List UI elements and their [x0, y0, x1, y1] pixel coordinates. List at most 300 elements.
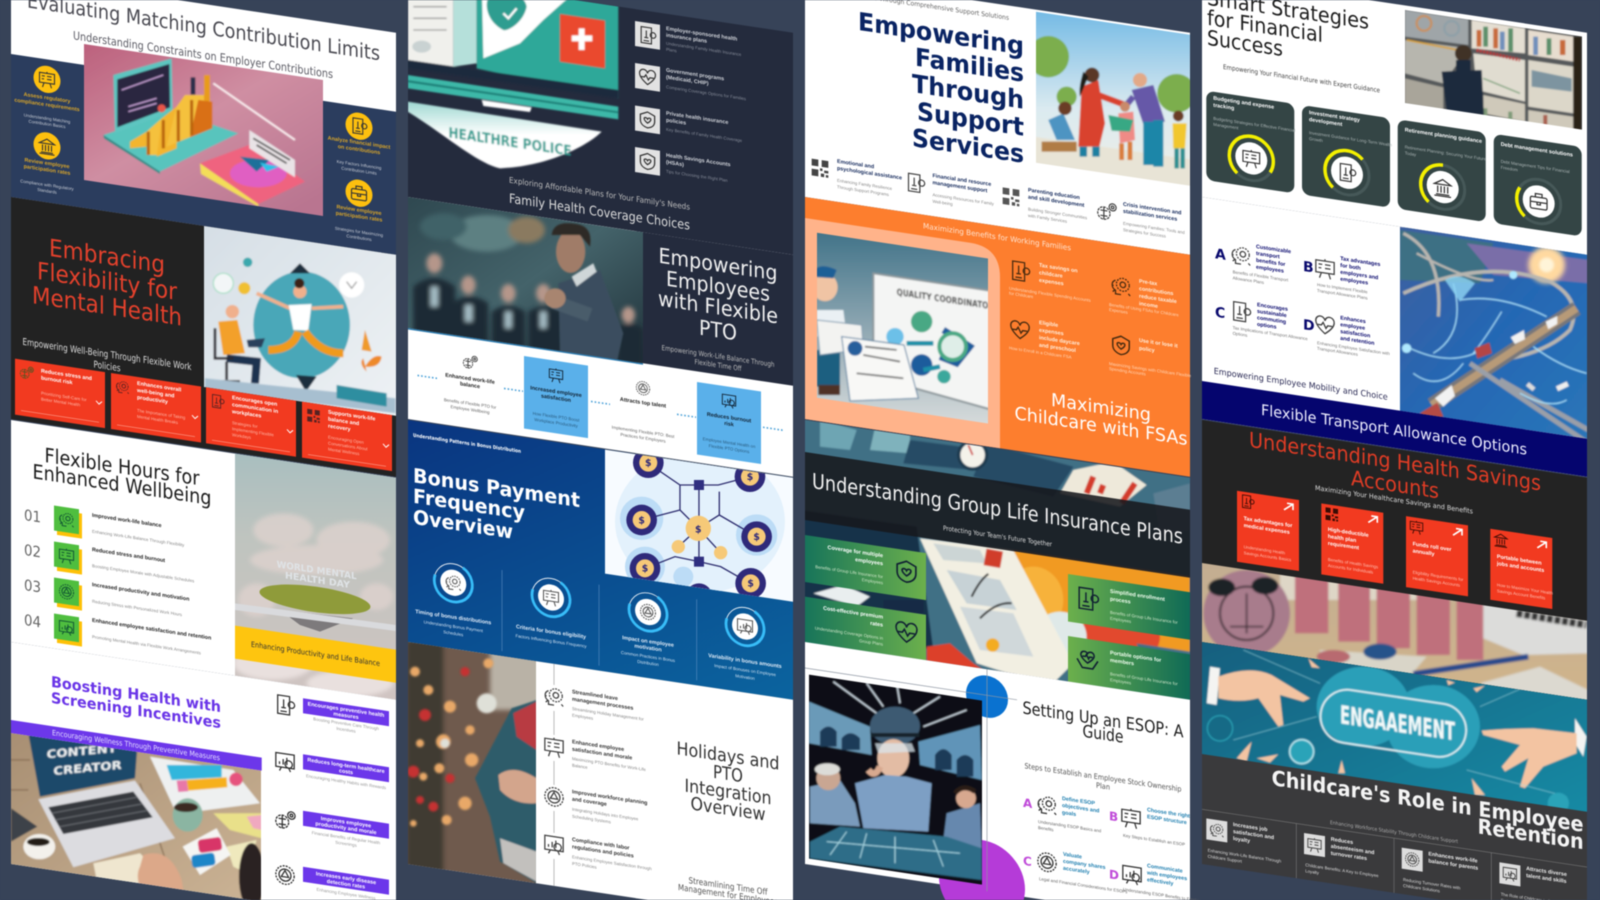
step C	[1023, 846, 1127, 894]
item: work-life balance	[444, 352, 497, 416]
item: burnout risk: Reduces burnout	[707, 412, 751, 424]
title: Family Health Coverage Choices	[509, 192, 690, 234]
card: debt	[1494, 134, 1582, 239]
card: encourages communication: Strategies for	[232, 420, 258, 429]
item: review participation right: Review employee	[337, 204, 381, 217]
row: government programs	[635, 63, 746, 105]
subtitle: Maximizing Your Healthcare Savings and Benefits	[1315, 484, 1473, 516]
item: absenteeism	[1304, 833, 1379, 884]
title: Frequency	[413, 484, 525, 525]
card: high-deductible: High-deductible	[1328, 527, 1369, 539]
row: leave management: Employees	[572, 713, 593, 721]
item: assess compliance: Assess regulatory	[24, 92, 70, 105]
subtitle: Streamlining Time Off	[689, 876, 768, 898]
decorative circle: magenta	[939, 834, 1025, 900]
item: absenteeism: turnover rates	[1331, 851, 1367, 862]
illustration: coin network: $	[747, 472, 753, 483]
card: portable options: Employees	[1110, 677, 1131, 685]
row 03: 03	[24, 576, 41, 596]
row: HSAs	[635, 147, 731, 186]
item: employee satisfaction	[530, 365, 582, 429]
item: psychological assistance: Enhancing Family Resilience	[837, 178, 893, 191]
item: impact: Common Practices in Bonus	[621, 650, 675, 663]
illustration: woman in helmet at holographic table	[807, 670, 987, 890]
item: assess compliance	[14, 61, 80, 131]
item: review participation left	[20, 128, 75, 198]
slide: Evaluating Matching Contribution Limits	[11, 0, 396, 255]
title: PTO	[699, 315, 737, 345]
highlight boxes	[524, 356, 761, 464]
row: long-term costs: costs	[339, 768, 353, 776]
item: absenteeism: absenteeism and	[1331, 844, 1374, 856]
card: high-deductible: Benefits of Health Savings	[1328, 557, 1378, 569]
card: supports recovery: Mental Wellness	[328, 447, 359, 456]
item: resource management: Accessing Resources for Family	[932, 192, 995, 206]
option A: employees	[1256, 265, 1284, 275]
item: diverse talent	[1499, 862, 1568, 900]
illustration: coin network	[604, 449, 794, 602]
item: analyze financial impact: Contribution Limits	[341, 166, 377, 176]
card: high-deductible: requirement	[1328, 541, 1359, 552]
item: absenteeism: Childcare Benefits: A Key to Employee	[1305, 862, 1379, 878]
item: work-life balance for parents: Reducing Turnover Rates with	[1403, 877, 1461, 891]
item: diverse talent: talent and skills	[1526, 873, 1567, 885]
card: budgeting: Management	[1213, 122, 1239, 131]
card: retirement: Today	[1405, 150, 1417, 157]
step A: Define ESOP	[1062, 796, 1095, 807]
title	[33, 441, 212, 510]
decorative circle: blue	[966, 672, 1008, 721]
option B: Tax advantages	[1340, 256, 1380, 268]
item: psychological assistance: Emotional and	[837, 159, 874, 170]
title: Enhanced Wellbeing	[33, 459, 212, 510]
card: enhances well-being	[111, 373, 201, 442]
option C	[1215, 296, 1308, 347]
title: Flexible Hours for	[44, 443, 200, 490]
photo: laptop on a desk: CONTENT	[47, 741, 117, 761]
illustration: healthcare policy document: HEALTHRE POLICE	[448, 125, 572, 160]
item: work-life balance for parents: Enhances work-life	[1428, 851, 1478, 865]
card: enhances well-being: Enhances overall	[137, 381, 182, 394]
item: review participation right: participation rates	[336, 211, 382, 224]
item: psychological assistance: psychological assistance	[837, 166, 902, 182]
card: encourages communication: communication in	[232, 402, 278, 415]
option B: employers and	[1340, 270, 1378, 281]
item: use it or lose it	[1109, 333, 1192, 383]
illustration: coin network: $	[642, 564, 648, 575]
subtitle: Plan	[1096, 781, 1110, 792]
item: job satisfaction: loyalty	[1233, 836, 1250, 845]
row: preventive health: measures	[333, 711, 359, 721]
item: job satisfaction: Childcare Support	[1208, 854, 1243, 864]
option D: Enhancing Employee Satisfaction with	[1317, 340, 1390, 356]
item: use it or lose it: policy	[1139, 346, 1155, 354]
title: Setting Up an ESOP: A	[1023, 698, 1184, 742]
row: preventive health: Encourages preventive health	[308, 702, 384, 719]
card: investment: Investment strategy	[1309, 110, 1360, 124]
card: tax advantages: Savings Accounts Basics	[1244, 550, 1291, 562]
option B: How to Implement Flexible	[1317, 282, 1368, 295]
card: enhances well-being: Mental Health Breaks	[137, 414, 178, 425]
item: eligible expenses: include daycare	[1039, 335, 1080, 347]
card: investment: Growth	[1309, 136, 1323, 143]
item: top talent: Practices for Employers	[620, 432, 666, 444]
photo: man pointing with team behind	[407, 197, 647, 370]
row 03: Increased productivity and motivation	[92, 582, 189, 603]
illustration: insurance policy document and flames	[804, 420, 1191, 682]
row: satisfaction and morale	[542, 733, 646, 779]
row: employer-sponsored: insurance plans	[666, 33, 707, 45]
option A: Allowance Plans	[1233, 275, 1264, 285]
option D: Enhances	[1340, 315, 1366, 325]
slide: Bonus Payment Frequency Overview	[408, 420, 800, 700]
row 02: 02	[24, 541, 41, 561]
slide: Flexible Hours for Enhanced Wellbeing	[11, 417, 400, 717]
item: work-life balance: balance	[460, 381, 480, 390]
row: government programs: Comparing Coverage Options for Families	[666, 84, 746, 101]
step A: Benefits	[1038, 825, 1054, 832]
option D: employee	[1340, 322, 1365, 332]
illustration: floating island in clouds: WORLD MENTAL	[277, 559, 357, 582]
slide: Understanding Group Life Insurance Plans	[800, 413, 1200, 713]
row: private policies	[635, 106, 743, 147]
row: preventive health: Incentives	[336, 726, 356, 734]
title	[32, 231, 182, 332]
card: encourages communication: workplaces	[231, 409, 261, 420]
item: review participation left: Compliance with Regulatory	[20, 178, 75, 192]
row: long-term costs	[276, 750, 389, 791]
item: top talent: Attracts top talent	[620, 397, 666, 410]
yellow caption bar: Enhancing Productivity and Life Balance	[251, 640, 380, 668]
row: satisfaction and morale: Balance	[572, 763, 588, 770]
item: eligible expenses: Eligible	[1039, 320, 1058, 329]
card: multiple employees	[805, 535, 926, 600]
row: government programs: Government programs	[666, 68, 724, 82]
title: Support	[917, 97, 1024, 142]
item: criteria: Factors Influencing Bonus Frequency	[515, 633, 587, 649]
title: Embracing	[49, 234, 165, 279]
item: variability: Impact of Bonuses on Employee	[714, 663, 776, 677]
row: leave management: management processes	[572, 697, 633, 712]
row 04: Enhanced employee satisfaction and retention	[92, 618, 211, 642]
card: reduces stress: Better Mental Health	[41, 397, 81, 407]
card: reduces stress	[15, 359, 105, 428]
item: work-life balance for parents	[1402, 847, 1478, 899]
row: HSAs: (HSAs)	[666, 160, 684, 168]
card: budgeting: tracking	[1213, 103, 1234, 112]
item: review participation left: Standards	[37, 187, 57, 195]
option B	[1303, 250, 1380, 302]
item: employee satisfaction: satisfaction	[541, 393, 571, 404]
card: investment: development	[1309, 117, 1342, 128]
row: leave management: Streamlining Holiday Management for	[572, 706, 644, 722]
title: Integration	[684, 776, 772, 809]
row 02: Reduced stress and burnout	[92, 547, 165, 564]
slide: Boosting Health with Screening Incentives	[0, 642, 396, 900]
title: Guide	[1082, 722, 1124, 748]
item: job satisfaction: satisfaction and	[1233, 829, 1274, 841]
card: multiple employees: employees	[855, 557, 883, 567]
card: supports recovery: balance and	[328, 417, 359, 427]
item: burnout risk: risk	[724, 421, 735, 429]
item: absenteeism: Reduces	[1331, 837, 1353, 846]
card: premium rates: rates	[870, 621, 883, 629]
card: simplified enrollment: Employees	[1110, 616, 1131, 624]
item: resource management: Financial and resource	[932, 173, 991, 188]
row 04: Promoting Mental Health via Flexible Work Arrangements	[92, 634, 201, 655]
item: eligible expenses	[1009, 316, 1080, 361]
card: tax advantages	[1237, 491, 1299, 571]
item: crisis intervention: Strategies for Success	[1123, 227, 1166, 239]
banner text: Maximizing Benefits for Working Families	[923, 221, 1071, 252]
card: debt: Debt management solutions	[1501, 142, 1573, 159]
title: Through	[912, 69, 1024, 115]
illustration: floating island in clouds: HEALTH DAY	[285, 570, 350, 591]
item: parenting education: Building Stronger Communities	[1028, 206, 1087, 220]
item: analyze financial impact: Analyze financial impact	[328, 136, 390, 151]
illustration: quality coordinator certificate	[810, 227, 993, 427]
card: funds roll over	[1406, 516, 1468, 596]
photo: analyst at chart wall	[1403, 7, 1585, 133]
item: absenteeism: Loyalty	[1305, 868, 1320, 875]
item: tax savings: expenses	[1039, 278, 1064, 287]
row: leave management	[542, 683, 644, 728]
item: impact: Distribution	[637, 659, 659, 667]
illustration: quality coordinator certificate: QUALITY COORDINATO	[897, 288, 989, 312]
card: investment	[1302, 105, 1392, 211]
item: parenting education	[1003, 184, 1087, 227]
item: burnout risk: Flexible PTO Options	[709, 443, 749, 454]
item: use it or lose it: Spending Accounts	[1109, 366, 1146, 377]
step B: Choose the right	[1147, 807, 1190, 820]
step B: ESOP structure	[1147, 814, 1187, 826]
row: compliance	[542, 831, 652, 878]
illustration: coin network: $	[695, 524, 702, 535]
title: Childcare with FSAs	[1014, 403, 1188, 450]
item: tax savings: for Childcare	[1009, 291, 1034, 299]
title: Overview	[691, 793, 766, 826]
card: portable: Savings Account Benefits	[1497, 588, 1545, 600]
slide: Childcare's Role in Employee Retention	[1200, 640, 1590, 900]
subtitle: Understanding Constraints on Employer Contributions	[73, 28, 333, 81]
item: analyze financial impact	[328, 108, 390, 178]
row: preventive health	[278, 694, 389, 739]
item: criteria	[515, 566, 587, 649]
card: supports recovery: recovery	[328, 424, 350, 433]
title: for Financial	[1207, 5, 1323, 47]
card: tax advantages: Tax advantages for	[1244, 516, 1293, 529]
item: employee satisfaction: How Flexible PTO Boost	[533, 411, 580, 423]
title: Screening Incentives	[51, 689, 221, 732]
card: encourages communication	[206, 387, 296, 457]
title band	[805, 452, 1190, 578]
title: Overview	[413, 505, 513, 544]
card: investment: Investment Guidance for Long-Term Wealth	[1309, 130, 1392, 148]
card: supports recovery	[302, 402, 392, 471]
option A: Benefits of Flexible Transport	[1233, 269, 1289, 283]
step C: C	[1023, 854, 1032, 869]
title: Success	[1207, 25, 1283, 61]
top label: Understanding Patterns in Bonus Distribution	[413, 433, 521, 455]
option B: B	[1303, 259, 1314, 276]
title: Maximizing	[1051, 390, 1151, 426]
card: multiple employees: Coverage for multiple	[828, 545, 883, 559]
item: crisis intervention: Empowering Families: Tools and	[1123, 221, 1185, 235]
item: variability	[708, 595, 782, 685]
item: impact: motivation	[634, 643, 662, 654]
item: tax savings: childcare	[1039, 270, 1063, 280]
item: assess compliance: compliance requirements	[14, 98, 80, 113]
subtitle: Empowering Well-Being Through Flexible Work	[23, 337, 192, 373]
slide: Maximizing Childcare with FSAs	[805, 197, 1192, 477]
connectors	[418, 375, 783, 430]
item: pre-tax contributions	[1109, 274, 1179, 323]
item: analyze financial impact: Key Factors Influencing	[337, 159, 382, 171]
subtitle: Flexible Time Off	[694, 357, 742, 373]
row 01: 01	[24, 506, 41, 526]
title	[1207, 0, 1369, 74]
option D: D	[1303, 317, 1315, 335]
item: impact	[621, 582, 675, 670]
row: compliance: Compliance with labor	[572, 837, 630, 852]
item: job satisfaction	[1206, 818, 1282, 870]
subtitle: Empowering Employee Mobility and Choice	[1214, 367, 1388, 403]
card: funds roll over: Eligibility Requirements for	[1413, 570, 1464, 582]
subtitle: Exploring Affordable Plans for Your Family's Needs	[509, 176, 690, 212]
card: portable	[1490, 529, 1554, 609]
row: private policies: policies	[666, 118, 686, 127]
item: parenting education: and skill development	[1028, 194, 1085, 209]
subtitle: Enhancing Workforce Stability Through Childcare Support	[1330, 820, 1458, 845]
step C: accurately	[1063, 866, 1090, 876]
row: employer-sponsored	[635, 21, 742, 63]
item: work-life balance: Employee Wellbeing	[450, 404, 490, 415]
item: criteria: Criteria for bonus eligibility	[516, 624, 586, 641]
item: tax savings	[1009, 258, 1091, 308]
row: government programs: (Medicaid, CHIP)	[666, 75, 709, 87]
option C: Encourages	[1257, 302, 1288, 313]
option A: benefits for	[1256, 258, 1286, 268]
illustration: engagement hands	[1200, 640, 1590, 817]
row 04	[24, 608, 211, 666]
title band: Protecting Your Team's Future Together	[943, 524, 1052, 548]
illustration: coin network: $	[645, 458, 652, 469]
row: employer-sponsored: Plans	[666, 47, 677, 53]
item: job satisfaction: Enhancing Work-Life Balance Through	[1208, 848, 1282, 864]
card: premium rates: Understanding Coverage Options in	[815, 625, 884, 641]
item: burnout risk	[703, 391, 756, 455]
row: long-term costs: Encouraging Healthy Habits with Rewards	[306, 773, 386, 790]
card: encourages communication: Encourages open	[232, 395, 277, 408]
photo: laptop on a desk	[10, 732, 262, 900]
card: encourages communication: Implementing Flexible	[232, 426, 274, 437]
item: analyze financial impact: on contributions	[338, 144, 380, 156]
option A: transport	[1256, 251, 1280, 260]
card: budgeting	[1206, 91, 1295, 196]
card: premium rates: Group Plans	[859, 638, 883, 647]
title: Empowering	[658, 243, 777, 285]
subtitle bar	[11, 720, 262, 771]
subtitle: Steps to Establish an Employee Stock Ownership	[1024, 761, 1182, 794]
row: private policies: Key Benefits of Family Health Coverage	[666, 127, 743, 143]
card: portable options	[1068, 636, 1190, 700]
option D: and retention	[1340, 336, 1374, 347]
row: employer-sponsored: Understanding Family Health Insurance	[666, 41, 742, 57]
photo: worker by holiday lights	[407, 640, 540, 893]
card: supports recovery: Supports work-life	[328, 410, 375, 423]
card: reduces stress: Prioritizing Self-Care for	[41, 391, 87, 402]
step D: D	[1109, 867, 1119, 883]
item: review participation left: participation rates	[24, 164, 70, 177]
item: burnout risk: Employee Mental Health on	[703, 436, 756, 449]
option B: employees	[1340, 276, 1368, 287]
item: pre-tax contributions: Pre-tax	[1139, 279, 1157, 287]
row: private policies: Private health insurance	[666, 111, 728, 126]
title: Retention	[1478, 813, 1584, 854]
row: long-term costs: Reduces long-term healthcare	[307, 757, 385, 775]
row: employee productivity: Screenings	[335, 840, 357, 848]
row 01: Enhancing Work-Life Balance Through Flexibility	[92, 529, 185, 548]
title	[658, 243, 778, 351]
card: funds roll over: annually	[1413, 548, 1434, 558]
card: encourages communication: Workdays	[232, 432, 251, 440]
row: employee productivity: productivity and morale	[315, 821, 377, 836]
card: high-deductible: health plan	[1328, 534, 1356, 544]
item: resource management: management support	[932, 180, 988, 194]
item: timing	[415, 551, 491, 641]
slide: Setting Up an ESOP: A Guide	[805, 642, 1208, 900]
step D	[1109, 858, 1208, 900]
step D: with employees	[1146, 870, 1187, 882]
item: review participation right: Contributions	[346, 233, 372, 242]
step A: goals	[1062, 810, 1076, 818]
title: Bonus Payment	[413, 463, 580, 512]
step A: A	[1023, 796, 1033, 811]
title: Employees	[666, 266, 770, 306]
row: compliance: Enhancing Employee Satisfaction through	[572, 854, 652, 871]
item: resource management: Well-being	[932, 199, 953, 207]
item: timing: Understanding Bonus Payment	[424, 619, 484, 633]
row: early detection: Increases early disease	[316, 871, 376, 886]
row: preventive health: Boosting Preventive Care Through	[313, 716, 379, 731]
card: premium rates: Cost-effective premium	[823, 606, 883, 621]
item: pre-tax contributions: contributions	[1139, 286, 1173, 297]
card: retirement: Retirement planning guidance	[1405, 127, 1482, 145]
item: review participation right	[335, 176, 384, 244]
card: budgeting: Budgeting and expense	[1213, 96, 1274, 111]
step C: Legal and Financial Considerations for ESOPs	[1039, 876, 1127, 894]
item: crisis intervention	[1098, 198, 1185, 242]
subtitle: Empowering Your Financial Future with Expert Guidance	[1223, 63, 1380, 94]
title: Holidays and	[676, 738, 780, 775]
item: employee satisfaction: Workplace Productivity	[534, 417, 579, 429]
card: multiple employees: Benefits of Group Life Insurance for	[815, 564, 884, 579]
subtitle bar: Encouraging Wellness Through Preventive Measures	[52, 728, 220, 762]
step B: Key Steps to Establish an ESOP	[1123, 833, 1185, 847]
illustration: healthcare policy document	[408, 0, 618, 168]
item: variability: Variability in bonus amounts	[708, 653, 782, 670]
item: crisis intervention: Crisis intervention and	[1123, 202, 1181, 216]
card: portable: Portable between	[1497, 554, 1542, 567]
step C: Valuate	[1063, 852, 1082, 861]
step D: effectively	[1147, 877, 1173, 887]
option C: Options	[1233, 331, 1247, 338]
item: review participation left: Review employee	[25, 158, 69, 170]
title: Empowering	[858, 7, 1024, 61]
row: workforce planning: Scheduling Systems	[572, 814, 611, 824]
title: Flexibility for	[37, 257, 177, 306]
item: timing: Schedules	[443, 629, 463, 637]
